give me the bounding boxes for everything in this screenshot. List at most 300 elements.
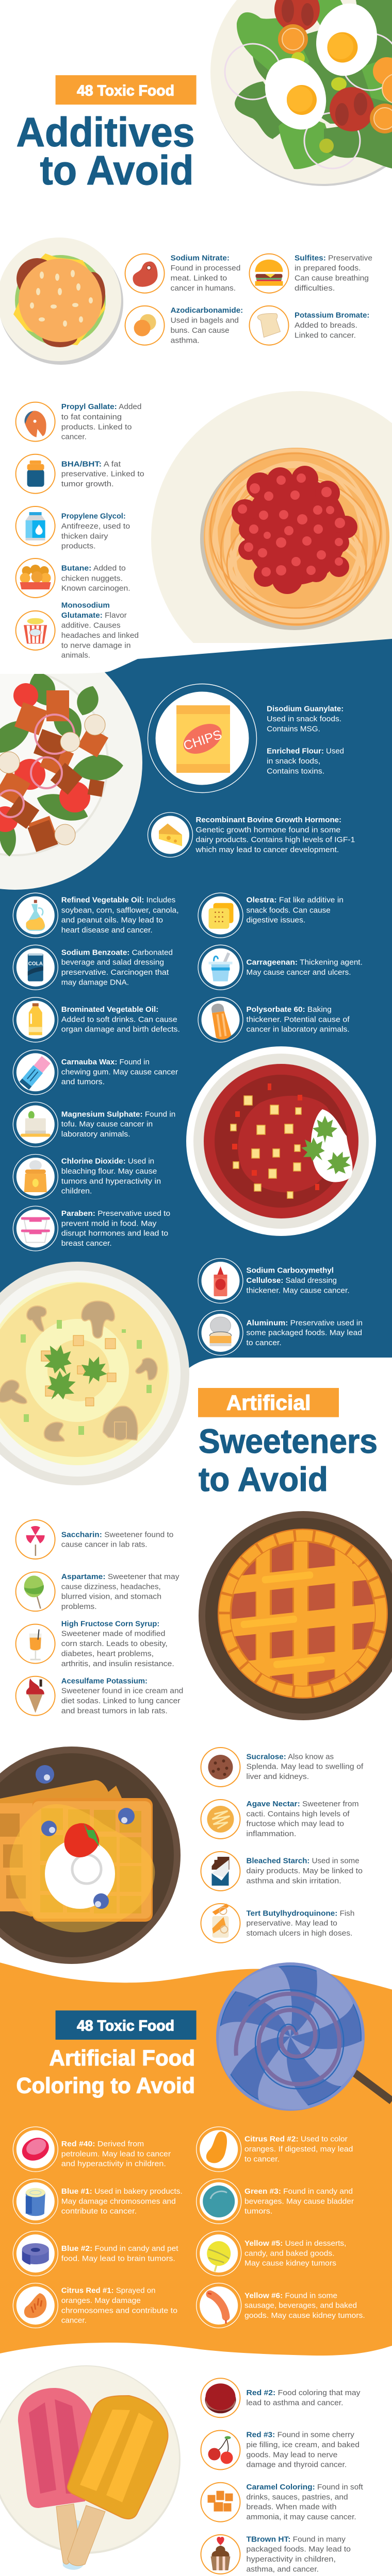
item: Monosodium Glutamate: [16, 602, 139, 660]
text: Sulfites: [295, 255, 372, 293]
icon: green lollipop: [24, 1575, 44, 1608]
text: Potassium Bromate: Added to breads.: [295, 321, 357, 330]
text: Azodicarbonamide: [171, 307, 243, 345]
text: Saccharin: cause cancer in lab rats.: [61, 1541, 148, 1549]
text: Propylene Glycol: products.: [61, 543, 96, 551]
illustration: spaghetti with sauce on plate: [151, 391, 392, 643]
text: High Fructose Corn Syrup: Sweetener made of modified: [61, 1630, 165, 1638]
text: Brominated Vegetable Oil: [61, 1006, 180, 1034]
text: Butane: Butane: Added to: [61, 565, 126, 573]
illustration: popsicles on plate: [0, 2365, 181, 2570]
text: Red #40: [61, 2140, 171, 2168]
text: Acesulfame Potassium: and breast tumors in lab rats.: [61, 1707, 168, 1715]
text: Aspartame: blurred vision, and stomach: [61, 1593, 161, 1601]
banner: 48 Toxic Food: 48 Toxic Food: [77, 83, 174, 99]
text: Saccharin: Saccharin: Sweetener found to: [61, 1531, 173, 1539]
text: Aluminum: Aluminum: Preservative used in: [247, 1319, 363, 1327]
text: Aspartame: problems.: [61, 1603, 97, 1611]
item: Red #40: [13, 2127, 171, 2172]
text: Brominated Vegetable Oil: organ damage and birth defects.: [61, 1026, 180, 1034]
text: Sucralose: Splenda. May lead to swelling of: [247, 1763, 364, 1771]
text: Azodicarbonamide: Used in bagels and: [171, 317, 239, 325]
text: Citrus Red #1: chromosomes and contribute to: [61, 2307, 177, 2315]
text: Agave Nectar: [247, 1800, 359, 1838]
heading: Additives to Avoid: [17, 109, 195, 193]
text: Olestra: Olestra: Fat like additive in: [247, 896, 344, 905]
text: Agave Nectar: cacti. Contains high levels of: [247, 1810, 350, 1818]
item: Sodium Benzoate: [13, 945, 173, 990]
icon: tofu: [21, 1111, 51, 1137]
text: Monosodium Glutamate: Glutamate: Flavor: [61, 612, 127, 620]
item: Potassium Bromate: [250, 306, 369, 345]
panel: orange food coloring background: [0, 1962, 392, 2355]
text: Disodium Guanylate: Disodium Guanylate:: [267, 705, 344, 714]
text: Olestra: [247, 896, 344, 925]
heading: Artificial Food Coloring to Avoid: Coloring to Avoid: [17, 2074, 195, 2098]
icon: burger: [255, 260, 283, 286]
icon: popcorn: [24, 618, 47, 643]
text: Bleached Starch: Bleached Starch: Used in some: [247, 1857, 360, 1866]
item: Acesulfame Potassium: [16, 1676, 183, 1716]
text: Carnauba Wax: [61, 1058, 178, 1087]
icon: cherries: [208, 2436, 233, 2464]
item: Sodium Carboxymethyl Cellulose: [198, 1258, 350, 1303]
item: Blue #1: [13, 2179, 183, 2224]
text: Sodium Nitrate: Found in processed: [171, 264, 240, 273]
text: Red #2: lead to asthma and cancer.: [247, 2399, 344, 2407]
text: Citrus Red #2: oranges. If digested, may lead: [244, 2145, 353, 2154]
text: High Fructose Corn Syrup: diabetes, heart problems,: [61, 1650, 154, 1658]
banner: 48 Toxic Food: [56, 75, 197, 105]
item: Sulfites: [250, 254, 372, 293]
icon: sausage: [208, 2293, 226, 2324]
text: Sodium Carboxymethyl Cellulose: thickener. May cause cancer.: [247, 1286, 350, 1295]
text: Sodium Benzoate: may damage DNA.: [61, 978, 129, 987]
text: Blue #2: food. May lead to brain tumors.: [61, 2255, 175, 2263]
text: Recombinant Bovine Growth Hormone: Genetic growth hormone found in some: [196, 826, 340, 834]
text: Red #2: [247, 2389, 361, 2407]
text: Acesulfame Potassium: diet sodas. Linked to lung cancer: [61, 1697, 181, 1705]
text: Refined Vegetable Oil: Refined Vegetable Oil: Includes: [61, 896, 175, 905]
text: Yellow #6: goods. May cause kidney tumors.: [244, 2312, 365, 2320]
text: Enriched Flour: Contains toxins.: [267, 767, 324, 775]
text: Monosodium Glutamate: additive. Causes: [61, 622, 121, 630]
text: Polysorbate 60: [247, 1006, 350, 1034]
text: Green #3: tumors.: [244, 2208, 272, 2216]
item: Propylene Glycol: [16, 506, 130, 551]
icon: chocolate cookie: [208, 1755, 233, 1780]
text: Yellow #6: Yellow #6: Found in some: [244, 2292, 337, 2300]
icon: food containers: [21, 1217, 50, 1243]
text: Agave Nectar: fructose which may lead to: [247, 1820, 344, 1828]
icon: cupcake: [210, 2537, 230, 2570]
text: TBrown HT: hyperactivity in children,: [247, 2555, 336, 2564]
text: Tert Butylhydroquinone: Tert Butylhydroquinone: Fish: [247, 1909, 354, 1918]
text: Citrus Red #1: Citrus Red #1: Sprayed on: [61, 2287, 156, 2295]
text: Potassium Bromate: [295, 312, 369, 340]
text: Monosodium Glutamate: headaches and linked: [61, 632, 139, 640]
text: Red #2: Red #2: Food coloring that may: [247, 2389, 361, 2397]
text: Aspartame: [61, 1573, 179, 1611]
text: Azodicarbonamide: asthma.: [171, 337, 200, 345]
heading: Additives to Avoid: to Avoid: [40, 147, 194, 193]
text: Tert Butylhydroquinone: stomach ulcers in high doses.: [247, 1929, 353, 1938]
text: Red #3: pie filling, ice cream, and baked: [247, 2441, 360, 2449]
illustration: blue swirl lollipop: [199, 1956, 392, 2129]
icon: crackers: [208, 903, 233, 929]
text: TBrown HT: asthma, and cancer.: [247, 2565, 319, 2573]
item: Saccharin: [16, 1520, 173, 1559]
item: Carnauba Wax: [13, 1050, 178, 1095]
icon: yellow lollipop: [207, 2241, 231, 2272]
text: Blue #2: [61, 2245, 178, 2263]
text: Potassium Bromate: Linked to cancer.: [295, 332, 356, 340]
text: Disodium Guanylate: Used in snack foods.: [267, 715, 341, 723]
text: Sodium Benzoate: beverage and salad dressing: [61, 959, 164, 967]
item: Sodium Nitrate: [125, 254, 240, 293]
text: Sodium Nitrate: cancer in humans.: [171, 284, 236, 293]
text: Carnauba Wax: and tumors.: [61, 1078, 105, 1087]
text: Recombinant Bovine Growth Hormone: [195, 816, 355, 854]
icon: blue candy ring: [22, 2243, 49, 2265]
text: Magnesium Sulphate: laboratory animals.: [61, 1130, 130, 1139]
icon: pink swirl lollipop: [26, 1526, 45, 1556]
text: Red #3: Red #3: Found in some cherry: [247, 2431, 355, 2439]
text: Blue #1: [61, 2188, 183, 2216]
icon: jelly bean: [205, 2129, 231, 2165]
text: High Fructose Corn Syrup: arthritis, and insulin resistance.: [61, 1660, 174, 1668]
text: Refined Vegetable Oil: heart disease and cancer.: [61, 926, 153, 935]
text: High Fructose Corn Syrup: [61, 1620, 174, 1668]
text: Paraben: [61, 1210, 170, 1248]
item: Chlorine Dioxide: [13, 1154, 161, 1199]
icon: jam jar: [27, 461, 44, 487]
text: Blue #2: Blue #2: Found in candy and pet: [61, 2245, 178, 2253]
text: Red #40: petroleum. May lead to cancer: [61, 2150, 171, 2158]
text: Yellow #5: [244, 2240, 346, 2268]
text: BHA/BHT: tumor growth.: [61, 480, 114, 488]
text: Sodium Nitrate: Sodium Nitrate:: [171, 255, 230, 263]
text: Recombinant Bovine Growth Hormone: Recombinant Bovine Growth Hormone:: [196, 816, 341, 824]
panel: white cut-out above blue: [0, 631, 182, 674]
text: Propyl Gallate: [61, 403, 141, 442]
text: Citrus Red #1: oranges. May damage: [61, 2297, 141, 2305]
icon: pretzel jar: [213, 1904, 229, 1938]
panel: food coloring: [13, 1956, 392, 2328]
text: Chlorine Dioxide: [61, 1158, 161, 1196]
icon: red candy: [18, 2133, 53, 2165]
text: Blue #1: Blue #1: Used in bakery products.: [61, 2188, 183, 2196]
text: Enriched Flour: [267, 747, 344, 775]
icon: salmon steak: [25, 411, 46, 437]
text: Enriched Flour: Enriched Flour: Used: [267, 747, 344, 755]
text: Sodium Benzoate: preservative. Carcinogen that: [61, 969, 169, 977]
text: Acesulfame Potassium: Sweetener found in ice cream and: [61, 1687, 183, 1696]
icon: steak: [133, 262, 158, 287]
item: Disodium Guanylate and Enriched Flour: [148, 684, 344, 792]
item: Caramel Coloring: [201, 2483, 363, 2522]
item: Recombinant Bovine Growth Hormone: [148, 812, 355, 857]
icon: oil cruet: [26, 900, 45, 931]
text: Sulfites: Can cause breathing: [295, 274, 369, 282]
text: Polysorbate 60: Polysorbate 60: Baking: [247, 1006, 332, 1014]
text: Sodium Carboxymethyl Cellulose: Sodium Carboxymethyl: [247, 1267, 334, 1275]
icon: teal ball candy: [203, 2185, 235, 2217]
text: Paraben: prevent mold in food. May: [61, 1219, 157, 1228]
item: Blue #2: [13, 2231, 178, 2276]
text: Yellow #6: sausage, beverages, and baked: [244, 2302, 357, 2310]
item: Yellow #5: [197, 2231, 346, 2276]
banner: Artificial: Artificial: [226, 1391, 311, 1415]
panel: additives intro: [0, 0, 392, 365]
text: Acesulfame Potassium: [61, 1677, 183, 1715]
text: Propylene Glycol: Propylene Glycol:: [61, 513, 126, 521]
item: Butane: [16, 558, 130, 598]
text: Propylene Glycol: Antifreeze, used to: [61, 522, 130, 531]
text: Paraben: breast cancer.: [61, 1240, 112, 1248]
text: TBrown HT: packaged foods. May lead to: [247, 2546, 351, 2554]
illustration: lattice pie: [199, 1511, 392, 1720]
text: Azodicarbonamide: buns. Can cause: [171, 327, 230, 335]
icon: chicken nuggets: [20, 565, 51, 589]
icon: iced cookie: [207, 1806, 234, 1833]
item: Propyl Gallate: [16, 402, 141, 442]
text: Caramel Coloring: breads. When made with: [247, 2503, 336, 2512]
text: Sulfites: in prepared foods.: [295, 264, 361, 273]
text: Carnauba Wax: Carnauba Wax: Found in: [61, 1058, 150, 1066]
panel: additives on blue: [0, 684, 376, 1485]
text: Sulfites: Sulfites: Preservative: [295, 255, 372, 263]
item: Aspartame: [16, 1572, 179, 1611]
item: Olestra: [198, 893, 344, 938]
text: Chlorine Dioxide: bleaching flour. May cause: [61, 1167, 157, 1176]
text: Citrus Red #2: Citrus Red #2: Used to color: [244, 2136, 348, 2144]
icon: flour bag: [24, 1160, 47, 1192]
text: Bleached Starch: asthma and skin irritation.: [247, 1877, 341, 1885]
text: Bleached Starch: dairy products. May be linked to: [247, 1867, 363, 1875]
text: Magnesium Sulphate: Magnesium Sulphate: Found in: [61, 1110, 175, 1118]
text: Citrus Red #2: to cancer.: [244, 2155, 280, 2163]
text: Disodium Guanylate: Contains MSG.: [267, 725, 320, 733]
text: Butane: chicken nuggets.: [61, 574, 123, 583]
item: Magnesium Sulphate: [13, 1102, 175, 1147]
icon: bagel buns: [134, 314, 156, 336]
icon: ketchup bottle: [214, 1266, 227, 1296]
panel: additives list left: [16, 402, 144, 660]
text: Propyl Gallate: Propyl Gallate: Added: [61, 403, 141, 411]
text: Citrus Red #1: cancer.: [61, 2317, 87, 2325]
text: Caramel Coloring: Caramel Coloring: Found in soft: [247, 2483, 363, 2492]
text: Carrageenan: May cause cancer and ulcers.: [247, 969, 351, 977]
illustration: waffles with strawberry: [0, 1747, 181, 1964]
text: Blue #1: contribute to cancer.: [61, 2208, 137, 2216]
panel: artificial sweeteners: [0, 1388, 392, 1964]
icon: salt shaker: [211, 1003, 232, 1041]
illustration: salmon salad bowl: [0, 635, 142, 890]
item: TBrown HT: [201, 2535, 351, 2574]
item: Brominated Vegetable Oil: [13, 997, 180, 1042]
icon: chewing gum: [20, 1056, 51, 1090]
text: Monosodium Glutamate: Monosodium: [61, 602, 110, 610]
text: Tert Butylhydroquinone: preservative. May lead to: [247, 1920, 337, 1928]
text: Aluminum: some packaged foods. May lead: [247, 1329, 362, 1337]
text: Propylene Glycol: [61, 513, 130, 551]
text: Yellow #5: May cause kidney tumors: [244, 2260, 336, 2268]
item: Bleached Starch: [201, 1852, 363, 1891]
item: Polysorbate 60: [198, 997, 350, 1042]
icon: cola can: [28, 954, 43, 981]
icon: tin can: [209, 1317, 231, 1346]
text: Yellow #6: [244, 2292, 365, 2320]
icon: caramel cubes: [207, 2491, 233, 2512]
text: TBrown HT: TBrown HT: Found in many: [247, 2535, 346, 2544]
text: Brominated Vegetable Oil: Added to soft drinks. Can cause: [61, 1015, 177, 1024]
text: TBrown HT: [247, 2535, 351, 2573]
text: Carrageenan: [247, 959, 363, 977]
item: Aluminum: [198, 1311, 363, 1355]
text: Agave Nectar: Agave Nectar: Sweetener from: [247, 1800, 359, 1808]
text: Sucralose: Sucralose: Also know as: [247, 1753, 334, 1761]
item: Green #3: [197, 2179, 354, 2224]
text: Sodium Nitrate: [171, 255, 240, 293]
text: Paraben: disrupt hormones and lead to: [61, 1230, 168, 1238]
text: Citrus Red #2: [244, 2136, 353, 2163]
banner: 48 Toxic Food: 48 Toxic Food: [77, 2018, 174, 2035]
text: Green #3: beverages. May cause bladder: [244, 2197, 354, 2206]
text: Carrageenan: Carrageenan: Thickening agent.: [247, 959, 363, 967]
text: Sodium Nitrate: meat. Linked to: [171, 274, 227, 282]
text: Red #3: damage and thyroid cancer.: [247, 2461, 347, 2469]
text: Red #40: Red #40: Derived from: [61, 2140, 144, 2148]
text: Propylene Glycol: thicken dairy: [61, 532, 108, 540]
item: High Fructose Corn Syrup: [16, 1620, 174, 1668]
item: Azodicarbonamide: [125, 306, 243, 345]
icon: oil bottle: [29, 1003, 42, 1035]
text: Magnesium Sulphate: tofu. May cause cancer in: [61, 1121, 153, 1129]
text: Bleached Starch: [247, 1857, 363, 1885]
text: Agave Nectar: inflammation.: [247, 1830, 296, 1838]
text: Olestra: snack foods. Can cause: [247, 906, 331, 914]
text: Sodium Carboxymethyl Cellulose: [247, 1267, 350, 1295]
icon: bread slice: [257, 314, 281, 337]
item: Citrus Red #1: [13, 2283, 177, 2328]
text: Polysorbate 60: cancer in laboratory animals.: [247, 1026, 350, 1034]
text: Yellow #5: Yellow #5: Used in desserts,: [244, 2240, 346, 2248]
text: Brominated Vegetable Oil: Brominated Vegetable Oil:: [61, 1006, 158, 1014]
illustration: tomato soup bowl: [186, 1046, 376, 1236]
text: Caramel Coloring: [247, 2483, 363, 2521]
icon: chocolate bar: [211, 1857, 229, 1886]
text: Caramel Coloring: drinks, sauces, pastries, and: [247, 2493, 348, 2501]
text: Saccharin: [61, 1531, 173, 1549]
text: Disodium Guanylate: [267, 705, 344, 733]
item: Carrageenan: [198, 945, 363, 990]
icon: milk carton: [26, 512, 45, 540]
item: Citrus Red #2: [197, 2127, 353, 2172]
text: BHA/BHT: preservative. Linked to: [61, 470, 144, 478]
item: Sucralose: [201, 1748, 364, 1787]
text: Sodium Benzoate: [61, 948, 173, 987]
icon: yogurt cup: [208, 953, 232, 981]
illustration: salad plate with eggs: [210, 0, 392, 186]
text: Caramel Coloring: ammonia, it may cause cancer.: [247, 2513, 356, 2521]
text: Acesulfame Potassium: Acesulfame Potassium:: [61, 1677, 148, 1685]
icon: red disc candy: [205, 2383, 236, 2413]
text: Monosodium Glutamate: to nerve damage in: [61, 641, 131, 650]
text: Recombinant Bovine Growth Hormone: dairy products. Contains high levels of IGF-1: [196, 836, 355, 844]
text: Polysorbate 60: thickener. Potential cause of: [247, 1015, 350, 1024]
icon: cheese wedge: [159, 823, 182, 846]
heading: Artificial Food Coloring to Avoid: [17, 2046, 195, 2098]
text: Aspartame: cause dizziness, headaches,: [61, 1583, 161, 1591]
text: Paraben: Paraben: Preservative used to: [61, 1210, 170, 1218]
banner: Artificial: [198, 1388, 339, 1417]
text: Aluminum: to cancer.: [247, 1339, 282, 1347]
text: Potassium Bromate: Potassium Bromate:: [295, 312, 369, 320]
text: Sucralose: [247, 1753, 364, 1781]
text: Red #40: and hyperactivity in children.: [61, 2160, 166, 2168]
heading: Additives to Avoid: Additives: [17, 109, 195, 155]
icon: blue rock candy: [26, 2188, 45, 2216]
text: Refined Vegetable Oil: [61, 896, 179, 935]
text: Chlorine Dioxide: tumors and hyperactivity in: [61, 1177, 161, 1185]
icon: ice cream cone: [26, 1679, 44, 1713]
banner: 48 Toxic Food: [56, 2010, 197, 2040]
text: Sodium Carboxymethyl Cellulose: Cellulose: Salad dressing: [247, 1277, 337, 1285]
item: Paraben: [13, 1206, 170, 1251]
text: High Fructose Corn Syrup: corn starch. Leads to obesity,: [61, 1640, 168, 1648]
text: Magnesium Sulphate: [61, 1110, 175, 1139]
text: Sodium Benzoate: Sodium Benzoate: Carbonated: [61, 948, 173, 957]
text: Chlorine Dioxide: Chlorine Dioxide: Used in: [61, 1158, 154, 1166]
text: Aluminum: [247, 1319, 363, 1347]
text: Monosodium Glutamate: [61, 602, 139, 660]
text: Green #3: Green #3: Found in candy and: [244, 2188, 353, 2196]
item: Tert Butylhydroquinone: [201, 1904, 354, 1943]
icon: chips bag: CHIPS: [182, 727, 224, 753]
text: Propyl Gallate: cancer.: [61, 433, 87, 442]
text: Recombinant Bovine Growth Hormone: which may lead to cancer development.: [195, 846, 339, 854]
text: Citrus Red #1: [61, 2287, 177, 2325]
icon: chips bag: [176, 705, 230, 773]
illustration: burger on plate: [0, 238, 123, 365]
item: BHA/BHT: [16, 454, 144, 494]
text: Green #3: [244, 2188, 354, 2216]
text: Red #3: goods. May lead to nerve: [247, 2451, 337, 2459]
item: Red #2: [201, 2378, 361, 2417]
text: Aspartame: Aspartame: Sweetener that may: [61, 1573, 179, 1581]
text: Carnauba Wax: chewing gum. May cause cancer: [61, 1068, 178, 1076]
text: Enriched Flour: in snack foods,: [267, 757, 320, 766]
text: Azodicarbonamide: Azodicarbonamide:: [171, 307, 243, 315]
text: Butane: Known carcinogen.: [61, 585, 130, 593]
text: Olestra: digestive issues.: [247, 917, 305, 925]
icon: juice glass: [29, 1630, 42, 1660]
heading: Sweeteners to Avoid: Sweeteners: [199, 1422, 378, 1460]
text: BHA/BHT: BHA/BHT: A fat: [61, 460, 121, 468]
item: Yellow #6: [197, 2283, 365, 2328]
item: Red #3: [201, 2431, 360, 2470]
text: High Fructose Corn Syrup: High Fructose Corn Syrup:: [61, 1620, 159, 1628]
text: Butane: [61, 565, 130, 593]
icon: cola can: COLA: [28, 961, 43, 967]
icon: mandarin segment: [24, 2293, 46, 2318]
text: Blue #1: May damage chromosomes and: [61, 2197, 176, 2206]
text: Monosodium Glutamate: animals.: [61, 652, 90, 660]
heading: Sweeteners to Avoid: to Avoid: [199, 1460, 328, 1498]
panel: blue additives background: [0, 639, 392, 1369]
text: Propyl Gallate: to fat containing: [61, 413, 122, 421]
